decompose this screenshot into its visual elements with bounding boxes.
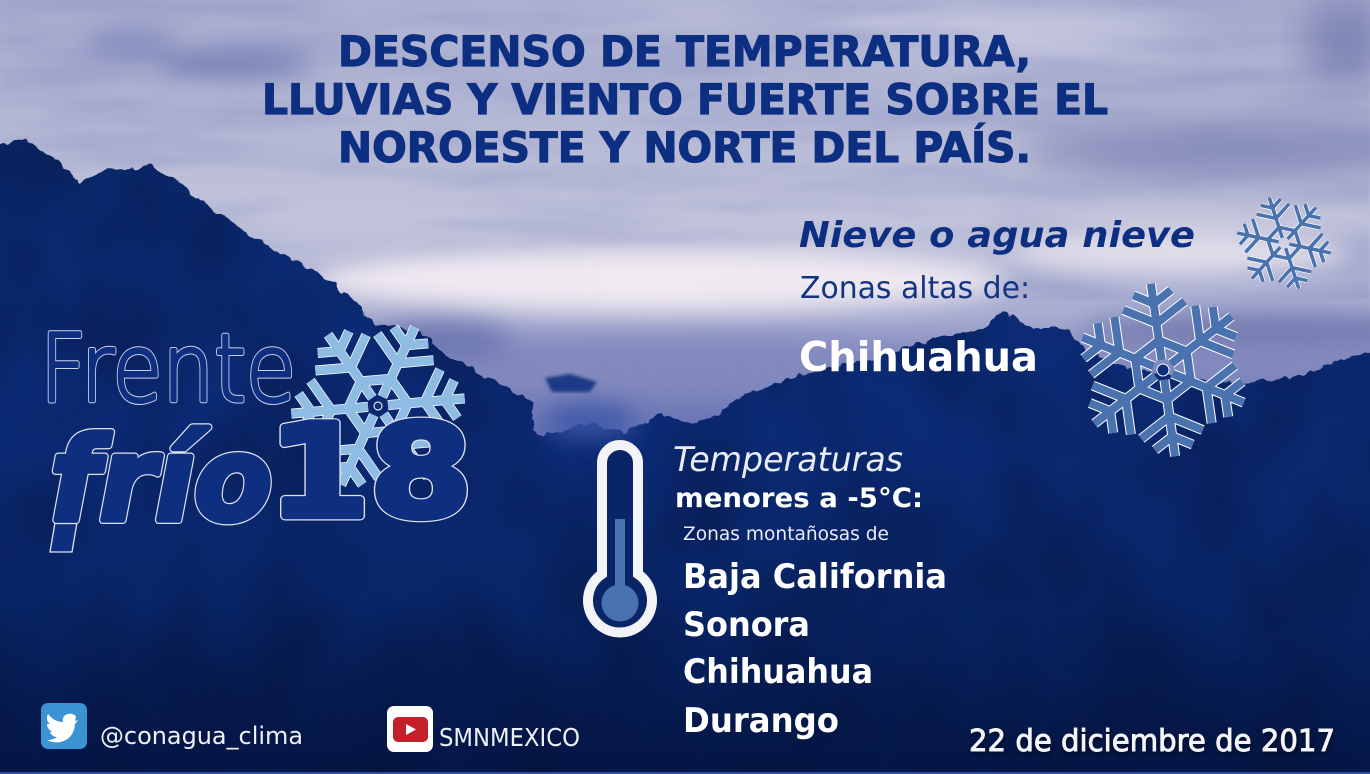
title: LLUVIAS Y VIENTO FUERTE SOBRE EL	[262, 75, 1108, 124]
logo number: 18: 18	[268, 398, 472, 547]
snow subheading: Zonas altas de:	[800, 271, 1030, 306]
bottom edge line	[0, 772, 1370, 774]
logo word: Frente: Frente	[40, 315, 296, 424]
logo word: frío: frío	[50, 413, 272, 548]
temperature heading: Temperaturas	[673, 440, 903, 480]
background: valley fog	[544, 374, 636, 440]
snow zone: Chihuahua	[799, 333, 1038, 381]
twitter handle: @conagua_clima	[100, 722, 303, 750]
youtube channel: SMNMEXICO	[439, 723, 580, 752]
list of states: Durango	[683, 701, 839, 741]
logo number: 18: 18	[268, 398, 472, 547]
background: right forested mountain	[520, 312, 1370, 774]
logo word: Frente: Frente	[40, 315, 296, 424]
list of states: Chihuahua	[683, 652, 873, 692]
background: left forested mountain	[0, 140, 640, 774]
list of states: Sonora	[683, 605, 810, 645]
logo: Frente frío 18	[40, 289, 497, 552]
logo word: frío: frío	[50, 413, 272, 548]
icon: twitter	[41, 703, 87, 749]
icon: youtube	[387, 706, 433, 752]
title: NOROESTE Y NORTE DEL PAÍS.	[338, 122, 1031, 172]
icon: large snowflake	[1061, 271, 1265, 469]
title	[262, 27, 1108, 172]
date: 22 de diciembre de 2017	[969, 724, 1335, 759]
icon: logo snowflake	[259, 289, 497, 523]
list of states: Baja California	[683, 557, 947, 597]
title: DESCENSO DE TEMPERATURA,	[338, 27, 1031, 76]
temperature threshold: menores a -5°C:	[675, 483, 923, 514]
snow heading: Nieve o agua nieve	[799, 215, 1195, 256]
list of states	[683, 557, 947, 741]
icon: small snowflake	[1222, 182, 1346, 304]
icon: thermometer	[588, 445, 652, 632]
mountain zones label: Zonas montañosas de	[683, 523, 889, 545]
